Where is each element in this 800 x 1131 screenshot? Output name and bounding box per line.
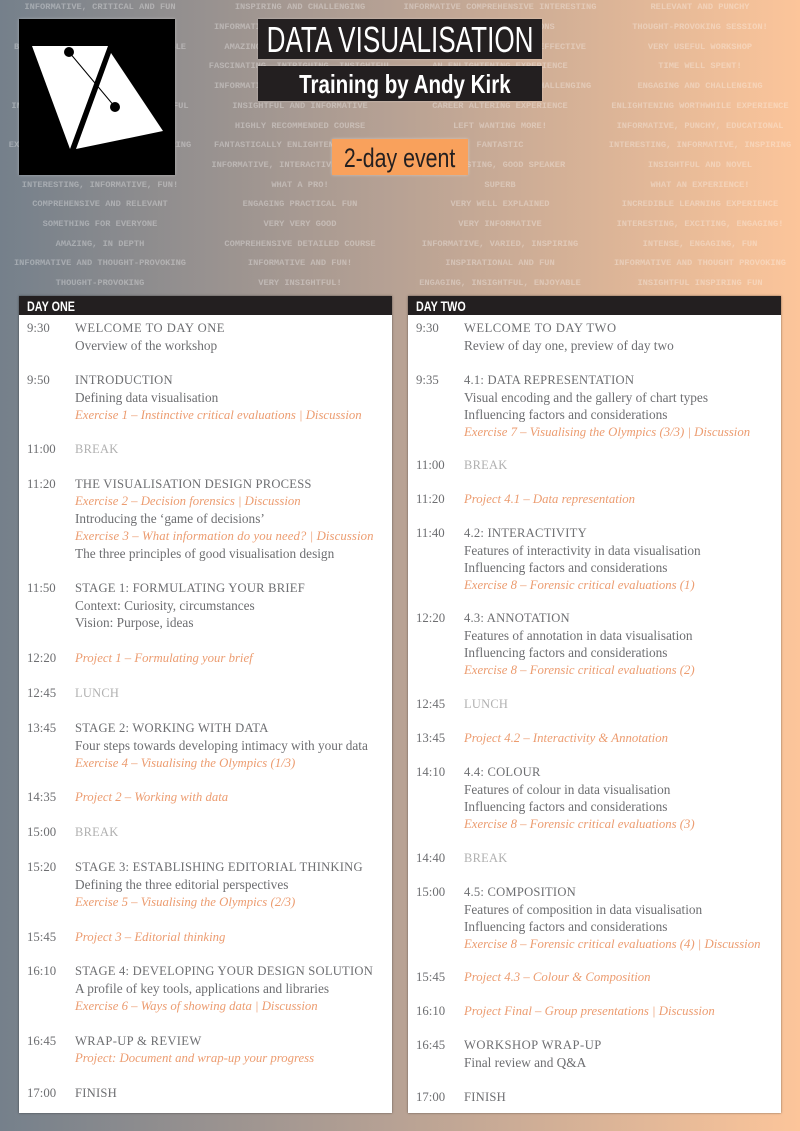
session 11:20: Exercise 3 – What information do you need? | Discussion [75,529,374,543]
session 16:45: WORKSHOP WRAP-UP [464,1038,602,1052]
panel: day two [408,296,781,1113]
session 15:00 [416,885,760,951]
session 16:45: Project: Document and wrap-up your progress [75,1051,314,1065]
testimonial column 4: INTERESTING, EXCITING, ENGAGING! [617,219,783,229]
testimonial column 4: WHAT AN EXPERIENCE! [650,180,750,190]
testimonial column 4: INSIGHTFUL AND NOVEL [648,160,752,170]
session 15:20: 15:20 [27,860,56,874]
testimonial column 4: VERY USEFUL WORKSHOP [648,42,752,52]
session 11:20: Project 4.1 – Data representation [464,492,635,506]
session 16:45 [416,1038,602,1070]
session 9:35: Influencing factors and considerations [464,407,667,422]
testimonial column 2 [209,2,391,288]
panel: day one [19,296,392,1113]
session 11:20: The three principles of good visualisation design [75,546,334,561]
session 14:40 [416,851,508,865]
testimonial column 3: AN ENLIGHTENING EXPERIENCE [432,61,568,71]
testimonial column 3: INTERESTING, GOOD SPEAKER [435,160,565,170]
session 16:45: Final review and Q&A [464,1055,586,1070]
testimonial column 2: WHAT A PRO! [271,180,329,190]
testimonial column 3: ENGAGING, INSIGHTFUL, ENJOYABLE [419,278,581,288]
session 17:00 [416,1090,506,1104]
testimonial column 2: ENGAGING PRACTICAL FUN [243,199,357,209]
session 13:45: Project 4.2 – Interactivity & Annotation [464,731,668,745]
session 16:10: 16:10 [416,1004,445,1018]
testimonial column 4: INFORMATIVE AND THOUGHT PROVOKING [614,258,786,268]
session 11:00: BREAK [464,458,508,472]
testimonial column 4: INSIGHTFUL INSPIRING FUN [637,278,763,288]
session 17:00: 17:00 [416,1090,445,1104]
session 17:00: 17:00 [27,1086,56,1100]
session 9:50: Exercise 1 – Instinctive critical evaluations | Discussion [75,408,362,422]
session 15:00: Exercise 8 – Forensic critical evaluations (4) | Discussion [464,937,760,951]
session 11:00: 11:00 [416,458,445,472]
testimonial column 3: VERY WELL EXPLAINED [450,199,550,209]
session 11:00 [416,458,508,472]
testimonial column 2: INFORMATIVE, FUN AND CHALLENGING! [214,22,386,32]
background testimonials [9,2,791,288]
testimonial column 2: FANTASTICALLY ENLIGHTENING COURSE [214,140,386,150]
testimonial column 4: ENLIGHTENING WORTHWHILE EXPERIENCE [611,101,789,111]
testimonial column 4: INTERESTING, INFORMATIVE, INSPIRING [609,140,791,150]
session 9:30: 9:30 [27,321,50,335]
testimonial column 3: LEFT WANTING MORE! [453,121,547,131]
session 11:40: 4.2: INTERACTIVITY [464,526,587,540]
session 12:45: LUNCH [75,686,119,700]
testimonial column 2: INSIGHTFUL AND INFORMATIVE [232,101,368,111]
testimonial column 3: INFORMATIVE, VARIED, INSPIRING [422,239,578,249]
subtitle: Training by Andy Kirk [299,69,511,99]
testimonial column 4: INCREDIBLE LEARNING EXPERIENCE [622,199,778,209]
session 11:00: BREAK [75,442,118,456]
session 16:10: A profile of key tools, applications and libraries [75,981,329,996]
session 9:30: WELCOME TO DAY TWO [464,321,617,335]
session 12:20 [416,611,695,677]
testimonial column 4: INFORMATIVE, PUNCHY, EDUCATIONAL [617,121,783,131]
session 11:40: Exercise 8 – Forensic critical evaluations (1) [464,578,695,592]
session 14:10: Exercise 8 – Forensic critical evaluations (3) [464,817,695,831]
session 13:45: 13:45 [27,721,56,735]
session 11:50: 11:50 [27,581,56,595]
testimonial column 2: INFORMATIVE AND THOUGHT-PROVOKING [214,81,386,91]
testimonial column 3: INSPIRING, ENGAGING AND EFFECTIVE [414,42,586,52]
session 9:30: Review of day one, preview of day two [464,338,674,353]
session 12:45: 12:45 [416,697,445,711]
session 12:20: 12:20 [27,651,56,665]
session 9:30: 9:30 [416,321,439,335]
testimonial column 1: BRILLIANT, ENGAGING AND ENJOYABLE [14,42,186,52]
session 11:40: Influencing factors and considerations [464,560,667,575]
session 9:30: WELCOME TO DAY ONE [75,321,225,335]
session 11:40: Features of interactivity in data visualisation [464,543,701,558]
testimonial column 3: IDEAS AND DISCUSSIONS [445,22,555,32]
session 12:20: Exercise 8 – Forensic critical evaluations (2) [464,663,695,677]
heading: day two: DAY TWO [416,298,466,314]
testimonial column 1 [9,2,191,288]
testimonial column 3: CAREER ALTERING EXPERIENCE [432,101,568,111]
testimonial column 4: ENGAGING AND CHALLENGING [637,81,763,91]
testimonial column 2: VERY INSIGHTFUL! [258,278,342,288]
session 15:20: Exercise 5 – Visualising the Olympics (2/3) [75,895,295,909]
session 9:35: Visual encoding and the gallery of chart types [464,390,708,405]
session 16:10: Exercise 6 – Ways of showing data | Discussion [75,999,318,1013]
session 11:50 [27,581,305,630]
session 9:50: Defining data visualisation [75,390,218,405]
session 15:00: Influencing factors and considerations [464,919,667,934]
session 14:35: Project 2 – Working with data [75,790,228,804]
testimonial column 3: INFORMATIVE COMPREHENSIVE INTERESTING [404,2,596,12]
session 11:50: Vision: Purpose, ideas [75,615,194,630]
testimonial column 2: INFORMATIVE AND FUN! [248,258,352,268]
title: DATA VISUALISATION [267,19,533,59]
session 11:40: 11:40 [416,526,445,540]
badge: 2-day event: 2-day event [344,143,456,173]
testimonial column 4: RELEVANT AND PUNCHY [650,2,750,12]
session 9:50: 9:50 [27,373,50,387]
testimonial column 2: VERY VERY GOOD [264,219,336,229]
session 13:45 [27,721,368,770]
session 14:10: 14:10 [416,765,445,779]
session 16:45 [27,1034,314,1065]
session 14:40: 14:40 [416,851,445,865]
session 16:10: 16:10 [27,964,56,978]
session 12:20: Project 1 – Formulating your brief [75,651,253,665]
session 15:45: 15:45 [27,930,56,944]
session 9:35: 4.1: DATA REPRESENTATION [464,373,634,387]
session 15:00: 4.5: COMPOSITION [464,885,576,899]
session 11:00: 11:00 [27,442,56,456]
testimonial column 2: HIGHLY RECOMMENDED COURSE [235,121,365,131]
session 11:20: 11:20 [27,477,56,491]
testimonial column 3: INFORMATIVE, INSPIRING, CHALLENGING [409,81,591,91]
session 16:45: 16:45 [27,1034,56,1048]
session 14:10 [416,765,695,831]
testimonial column 1: SOMETHING FOR EVERYONE [43,219,157,229]
session 16:45: 16:45 [416,1038,445,1052]
session 13:45: 13:45 [416,731,445,745]
session 15:00 [27,825,118,839]
testimonial column 4: INTENSE, ENGAGING, FUN [643,239,757,249]
session 17:00: FINISH [464,1090,506,1104]
testimonial column 1: THOUGHT-PROVOKING [56,278,144,288]
testimonial column 4 [609,2,791,288]
testimonial column 3: SUPERB [484,180,516,190]
session 11:50: Context: Curiosity, circumstances [75,598,255,613]
heading: day two [408,296,781,315]
session 16:10 [27,964,373,1013]
testimonial column 3: INSPIRATIONAL AND FUN [445,258,555,268]
session 16:45: WRAP-UP & REVIEW [75,1034,202,1048]
testimonial column 4: THOUGHT-PROVOKING SESSION! [632,22,768,32]
session 9:50 [27,373,362,422]
session 16:10: STAGE 4: DEVELOPING YOUR DESIGN SOLUTION [75,964,373,978]
testimonial column 2: FASCINATING, INTRIGUING, INSIGHTFUL [209,61,391,71]
session 11:20: THE VISUALISATION DESIGN PROCESS [75,477,312,491]
session 16:10: Project Final – Group presentations | Discussion [464,1004,715,1018]
testimonial column 2: AMAZING, USEFUL AND INSPIRING [224,42,376,52]
heading: day one [19,296,392,315]
session 11:40 [416,526,701,592]
session 12:45 [416,697,508,711]
subtitle [258,66,542,101]
session 11:20: 11:20 [416,492,445,506]
heading: day one: DAY ONE [27,298,75,314]
session 14:10: 4.4: COLOUR [464,765,541,779]
testimonial column 3 [404,2,596,288]
testimonial column 1: INTERESTING, INFORMATIVE, FUN! [22,180,178,190]
session 12:45 [27,686,119,700]
testimonial column 1: AMAZING, IN DEPTH [56,239,144,249]
testimonial column 2: COMPREHENSIVE DETAILED COURSE [224,239,376,249]
session 15:20: STAGE 3: ESTABLISHING EDITORIAL THINKING [75,860,363,874]
session 12:20: 12:20 [416,611,445,625]
session 15:45: Project 3 – Editorial thinking [75,930,225,944]
session 12:20: Features of annotation in data visualisation [464,628,693,643]
session 13:45: Exercise 4 – Visualising the Olympics (1/3) [75,756,295,770]
session 11:20 [27,477,374,561]
session 14:10: Influencing factors and considerations [464,799,667,814]
badge: 2-day event [332,139,468,175]
testimonial column 1: INFORMATIVE, USEFUL AND INSIGHTFUL [11,101,189,111]
testimonial column 3: VERY INFORMATIVE [458,219,542,229]
session 9:35 [416,373,750,439]
session 11:20: Exercise 2 – Decision forensics | Discussion [75,494,301,508]
testimonial column 2: INSPIRING AND CHALLENGING [235,2,365,12]
session 17:00 [27,1086,117,1100]
session 9:50: INTRODUCTION [75,373,173,387]
session 9:35: Exercise 7 – Visualising the Olympics (3/3) | Discussion [464,425,750,439]
testimonial column 1: EXCITING, CHALLENGING AND INSPIRING [9,140,191,150]
session 15:45: 15:45 [416,970,445,984]
session 14:10: Features of colour in data visualisation [464,782,670,797]
session 14:40: BREAK [464,851,508,865]
session 13:45: STAGE 2: WORKING WITH DATA [75,721,269,735]
session 15:45: Project 4.3 – Colour & Composition [464,970,651,984]
session 13:45: Four steps towards developing intimacy with your data [75,738,368,753]
session 12:45: LUNCH [464,697,508,711]
session 17:00: FINISH [75,1086,117,1100]
session 14:35: 14:35 [27,790,56,804]
session 15:20: Defining the three editorial perspectives [75,877,288,892]
testimonial column 2: INFORMATIVE, INTERACTIVE, ENGAGING [211,160,389,170]
testimonial column 3: FANTASTIC [477,140,523,150]
testimonial column 1: INFORMATIVE, CRITICAL AND FUN [24,2,176,12]
session 11:50: STAGE 1: FORMULATING YOUR BRIEF [75,581,305,595]
session 9:35: 9:35 [416,373,439,387]
session 12:45: 12:45 [27,686,56,700]
session 9:30: Overview of the workshop [75,338,217,353]
testimonial column 1: COMPREHENSIVE AND RELEVANT [32,199,168,209]
session 9:30 [27,321,225,353]
session 15:00: 15:00 [27,825,56,839]
session 15:00: BREAK [75,825,118,839]
session 11:00 [27,442,118,456]
session 11:20: Introducing the ‘game of decisions’ [75,511,265,526]
session 15:00: Features of composition in data visualisation [464,902,702,917]
icon: logo [19,19,175,175]
session 12:20: 4.3: ANNOTATION [464,611,570,625]
session 12:20: Influencing factors and considerations [464,645,667,660]
session 15:20 [27,860,363,909]
testimonial column 1: INFORMATIVE AND THOUGHT-PROVOKING [14,258,186,268]
session 9:30 [416,321,674,353]
testimonial column 4: TIME WELL SPENT! [658,61,742,71]
session 15:00: 15:00 [416,885,445,899]
